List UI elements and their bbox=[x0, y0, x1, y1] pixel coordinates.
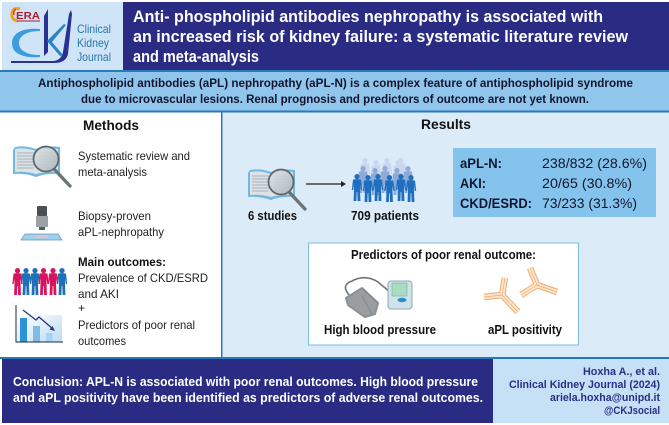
icon: patient crowd bbox=[352, 158, 416, 202]
label: 6 studies: 6 studies bbox=[248, 209, 297, 223]
stat: AKI bbox=[460, 176, 632, 191]
text: background statement: Antiphospholipid antibodies (aPL) nephropathy (aPL-N) is a complex feature of antiphospholipid syndrome bbox=[38, 76, 633, 90]
logo: journal name: Journal bbox=[77, 50, 111, 64]
icon: book and magnifier bbox=[248, 169, 305, 209]
text: main outcomes: Main outcomes: bbox=[78, 255, 166, 269]
icon: patients pink and blue bbox=[12, 268, 67, 295]
stat: aPL-N: 238/832 (28.6%) bbox=[542, 156, 647, 171]
text: systematic review bbox=[78, 149, 190, 179]
logo: ERA mark: ERA bbox=[16, 10, 40, 22]
icon: declining bar chart bbox=[16, 305, 63, 342]
text: biopsy-proven bbox=[78, 209, 164, 239]
panel: logo background bbox=[2, 2, 123, 70]
text: conclusion bbox=[13, 375, 483, 405]
icon: antibodies bbox=[484, 268, 557, 312]
text: main outcomes: and AKI bbox=[78, 287, 119, 301]
panel: prevalence statistics bbox=[453, 148, 656, 217]
heading: Results: Results bbox=[421, 117, 471, 132]
text: conclusion: and aPL positivity have been identified as predictors of adverse renal outcomes. bbox=[13, 391, 483, 405]
text: citation: Hoxha A., et al. bbox=[583, 366, 660, 378]
text: conclusion: Conclusion: APL-N is associated with poor renal outcomes. High blood pressure bbox=[13, 375, 478, 389]
label: aPL positivity: aPL positivity bbox=[488, 323, 562, 337]
title: and meta-analysis bbox=[133, 48, 259, 66]
label: high blood pressure: High blood pressure bbox=[324, 323, 436, 337]
title: Anti- phospholipid antibodies nephropathy is associated with bbox=[133, 8, 603, 26]
panel: title background bbox=[123, 2, 669, 70]
heading: Methods: Methods bbox=[83, 118, 139, 133]
title bbox=[133, 8, 628, 66]
stat: aPL-N bbox=[460, 156, 647, 171]
panel: results bbox=[221, 112, 669, 358]
logo: Clinical Kidney Journal bbox=[11, 8, 111, 64]
panel: methods bbox=[2, 112, 221, 358]
panel: background statement band bbox=[0, 70, 669, 112]
heading: predictors: Predictors of poor renal outcome: bbox=[351, 248, 536, 262]
text: biopsy-proven: Biopsy-proven bbox=[78, 209, 151, 223]
stat: AKI: AKI: bbox=[460, 176, 486, 191]
stat: CKD/ESRD: CKD/ESRD: bbox=[460, 196, 532, 211]
text: background statement bbox=[38, 76, 633, 106]
logo: journal name: Kidney bbox=[77, 36, 109, 50]
stat: CKD/ESRD: 73/233 (31.3%) bbox=[542, 196, 637, 211]
text: main outcomes: + bbox=[78, 301, 85, 315]
text: citation: @CKJsocial bbox=[604, 405, 660, 417]
text: citation: Clinical Kidney Journal (2024) bbox=[509, 379, 660, 391]
text: citation bbox=[509, 366, 660, 417]
logo: journal name bbox=[77, 22, 111, 64]
text: main outcomes: Predictors of poor renal bbox=[78, 318, 195, 332]
icon: book and magnifier bbox=[13, 146, 70, 186]
text: background statement: due to microvascular lesions. Renal prognosis and predictors of outcome are not yet known. bbox=[81, 92, 589, 106]
icon: blood pressure monitor bbox=[345, 278, 412, 317]
stat: CKD/ESRD bbox=[460, 196, 637, 211]
text: systematic review: Systematic review and bbox=[78, 149, 190, 163]
stat: AKI: 20/65 (30.8%) bbox=[542, 176, 632, 191]
logo: CKJ letters bbox=[11, 9, 72, 63]
text: biopsy-proven: aPL-nephropathy bbox=[78, 225, 164, 239]
logo: journal name: Clinical bbox=[77, 22, 111, 36]
arrow: studies to patients bbox=[306, 181, 346, 187]
label: 709 patients: 709 patients bbox=[351, 209, 419, 223]
panel: predictors of poor renal outcome bbox=[308, 243, 578, 345]
title: an increased risk of kidney failure: a systematic literature review bbox=[133, 28, 628, 46]
icon: microscope and slide bbox=[21, 206, 62, 240]
stat: aPL-N: aPL-N: bbox=[460, 156, 502, 171]
text: systematic review: meta-analysis bbox=[78, 165, 147, 179]
text: main outcomes bbox=[78, 255, 208, 348]
panel: conclusion bbox=[0, 357, 669, 423]
text: main outcomes: outcomes bbox=[78, 334, 126, 348]
text: citation: ariela.hoxha@unipd.it bbox=[550, 392, 660, 404]
panel: citation bbox=[493, 359, 669, 423]
text: main outcomes: Prevalence of CKD/ESRD bbox=[78, 271, 208, 285]
